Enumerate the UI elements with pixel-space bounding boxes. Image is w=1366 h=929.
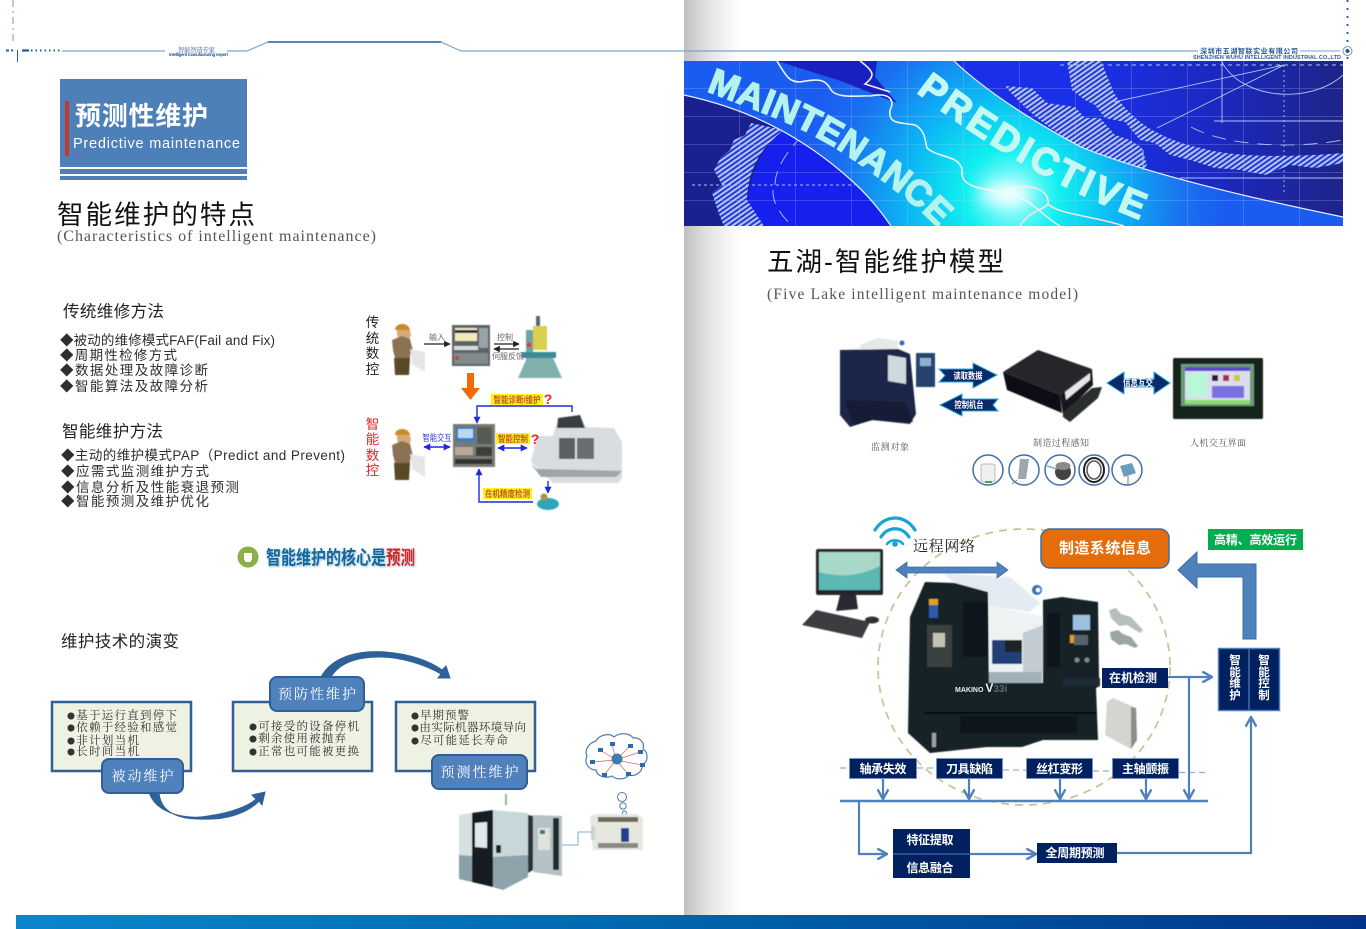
text block: traditional maintenance: ◆周期性检修方式 [60, 348, 178, 363]
arrow: orange transition [461, 373, 480, 400]
banner image: predictive maintenance gears [684, 61, 1343, 226]
icon: monitored machine [840, 338, 935, 427]
arrow: read data: 读取数据 [954, 370, 982, 381]
box: smart maintenance and control: 制 [1258, 689, 1270, 702]
main band [684, 61, 1343, 226]
controller, intelligent [453, 424, 495, 467]
label: intelligent CNC: 控 [366, 463, 380, 478]
label: intelligent CNC [366, 417, 380, 478]
text block: traditional maintenance: ◆智能算法及故障分析 [60, 379, 208, 394]
button: predictive maintenance [432, 755, 527, 789]
text: machine brand: MAKINO V33i [955, 681, 1007, 695]
squiggle gear outline [777, 61, 1060, 226]
panel: preventive maintenance [233, 702, 372, 771]
hatch ring right [1067, 61, 1343, 175]
header left label: Intelligent manufacturing expert [169, 52, 228, 57]
hatch gear teeth middle [1005, 86, 1147, 172]
label: traditional CNC: 控 [366, 362, 380, 377]
label: spindle chatter [1112, 758, 1178, 778]
box: smart maintenance and control: 能 [1258, 665, 1270, 679]
blue feedback lines [424, 406, 572, 502]
arrow: remote link [896, 562, 1008, 578]
label: tool defect: 刀具缺陷 [946, 761, 993, 776]
tag: smart diagnosis [491, 391, 552, 407]
icon: main machining center [908, 573, 1100, 753]
box: smart maintenance and control: 能 [1229, 665, 1241, 679]
icon: operator, traditional [392, 324, 425, 375]
box: full-cycle prediction: 全周期预测 [1046, 845, 1104, 860]
text block: traditional maintenance [60, 302, 275, 394]
panel: reactive maintenance: ●基于运行直到停下 [67, 707, 178, 723]
page fold shadow [684, 0, 740, 915]
labels: input, control, servo feedback: 控制 [497, 332, 513, 342]
title block: Predictive maintenance [73, 136, 240, 152]
box: feature extraction and fusion: 信息融合 [906, 860, 954, 875]
header rule [6, 0, 1352, 62]
arrow: feedback elbow [1178, 552, 1256, 639]
panel: reactive maintenance [52, 702, 191, 771]
box: smart maintenance and control: 智 [1258, 653, 1270, 667]
icon: sensing box [1003, 350, 1102, 422]
icon: tool holders [1109, 608, 1143, 648]
lower left dark [684, 96, 780, 226]
icon: probe dish [537, 494, 559, 510]
label: on-machine inspection: 在机检测 [1109, 670, 1157, 685]
heading: characteristics [57, 200, 376, 245]
label: on-machine inspection [1102, 668, 1168, 688]
button: preventive maintenance [270, 677, 364, 711]
text block: intelligent maintenance: ◆信息分析及性能衰退预测 [61, 479, 239, 495]
box: feature extraction and fusion [893, 829, 970, 878]
tag: high precision, high efficiency [1208, 529, 1303, 550]
tag: smart control [496, 431, 539, 447]
heading: five lake model: (Five Lake intelligent maintenance model) [767, 286, 1078, 303]
panel: predictive maintenance [396, 702, 535, 771]
caption: process sensing: 制造过程感知 [1033, 436, 1089, 449]
dark tooth inset [777, 61, 897, 103]
hatch ring left [712, 123, 784, 226]
icons: sensors [973, 455, 1142, 485]
icon: operator, intelligent [392, 429, 425, 480]
text block: intelligent maintenance: ◆应需式监测维护方式 [61, 463, 210, 479]
band edge lines [684, 61, 1343, 226]
arrow: information exchange [1107, 372, 1170, 394]
callout: manufacturing system info [1041, 529, 1169, 568]
banner word: predictive: PREDICTIVE [917, 72, 1149, 220]
arrow: reactive to preventive [149, 792, 265, 819]
panel: reactive maintenance: ●非计划当机 [67, 732, 140, 748]
text block: traditional maintenance: 传统维修方法 [63, 302, 164, 321]
button: reactive maintenance: 被动维护 [112, 766, 174, 786]
icon: HMI screen [1173, 358, 1263, 419]
connector: machine to PLC [562, 832, 592, 845]
label: traditional CNC: 统 [366, 331, 379, 346]
labels: input, control, servo feedback: 伺服反馈 [492, 351, 524, 361]
button: predictive maintenance: 预测性维护 [440, 762, 518, 782]
text block: traditional maintenance: ◆数据处理及故障诊断 [60, 363, 208, 378]
icon: network cloud [586, 734, 647, 815]
label: traditional CNC [366, 315, 380, 377]
header left label: 智能智造专家 [178, 45, 216, 54]
label: traditional CNC: 数 [366, 346, 380, 361]
tag: smart control: 智能控制 [498, 433, 528, 444]
box: smart maintenance and control: 维 [1229, 676, 1241, 690]
callout: core is prediction: 智能维护的核心是 [266, 546, 386, 569]
text block: traditional maintenance: ◆被动的维修模式FAF(Fail and Fix) [60, 333, 275, 348]
icon: data collector [1105, 698, 1137, 749]
footer band [16, 915, 1366, 929]
labels: input, control, servo feedback: 输入 [429, 332, 445, 342]
label: spindle chatter: 主轴颤振 [1122, 761, 1169, 776]
title block: 预测性维护 [75, 101, 208, 131]
tag: smart diagnosis: ? [544, 391, 552, 407]
header left label [169, 45, 228, 57]
title block [60, 79, 247, 180]
heading: evolution of maintenance: 维护技术的演变 [61, 632, 179, 651]
tag: high precision, high efficiency: 高精、高效运行 [1214, 532, 1297, 547]
heading: five lake model: 五湖-智能维护模型 [767, 247, 1004, 277]
icon: wifi [875, 518, 915, 547]
box: smart maintenance and control: 智 [1229, 653, 1241, 667]
caption: HMI: 人机交互界面 [1190, 436, 1246, 449]
text block: intelligent maintenance: ◆智能预测及维护优化 [61, 494, 209, 509]
label: traditional CNC: 传 [366, 315, 379, 330]
panel: predictive maintenance: ●由实际机器环境导向 [411, 719, 526, 735]
panel: preventive maintenance: ●剩余使用被抛弃 [249, 730, 346, 746]
panel: predictive maintenance: ●尽可能延长寿命 [411, 732, 508, 748]
label: intelligent CNC: 智 [366, 417, 379, 432]
tag: smart diagnosis: 智能诊断/维护 [494, 394, 540, 405]
box: smart maintenance and control: 控 [1258, 676, 1270, 690]
callout: core is prediction: 预测 [386, 547, 415, 569]
label: remote network: 远程网络 [913, 535, 975, 556]
box: smart maintenance and control: 护 [1229, 688, 1241, 702]
panel: predictive maintenance: ●早期预警 [411, 707, 470, 723]
icon: milling machine [518, 316, 562, 378]
arrow: preventive to predictive [321, 652, 450, 678]
text block: intelligent maintenance [61, 422, 345, 509]
banner word: maintenance: MAINTENANCE [708, 68, 955, 226]
header company label [1193, 46, 1341, 61]
drafting lines [692, 60, 1343, 226]
callout: manufacturing system info: 制造系统信息 [1059, 539, 1151, 557]
label: bearing failure: 轴承失效 [860, 761, 906, 776]
heading: characteristics: (Characteristics of intelligent maintenance) [57, 228, 376, 245]
button: preventive maintenance: 预防性维护 [278, 684, 356, 704]
diagram: CNC comparison [366, 315, 622, 510]
label: bearing failure [850, 758, 916, 778]
grid [684, 61, 1343, 226]
header company label: 深圳市五湖智联实业有限公司 [1200, 46, 1298, 56]
tag: smart control: ? [531, 431, 539, 447]
dashed sensing line [840, 768, 1208, 772]
label: tool defect [936, 758, 1002, 778]
panel: reactive maintenance: ●长时间当机 [67, 743, 140, 759]
text block: intelligent maintenance: ◆主动的维护模式PAP（Predict and Prevent) [61, 448, 345, 463]
label: lead screw deformation: 丝杠变形 [1036, 761, 1083, 776]
tag: on-machine precision test: 在机精度检测 [485, 488, 530, 499]
icon: PLC controller [590, 814, 643, 850]
arrows: input and control [424, 344, 519, 349]
button: reactive maintenance [102, 759, 183, 793]
icon: machining center photo [459, 794, 562, 890]
arrow: information exchange: 信息互交 [1123, 377, 1153, 388]
arrow: read data [939, 363, 997, 388]
label: smart interaction: 智能交互 [422, 432, 452, 443]
arrow: machine control [940, 394, 998, 416]
icon: machining center [531, 415, 622, 483]
heading: characteristics: 智能维护的特点 [57, 200, 255, 230]
label: intelligent CNC: 数 [366, 448, 380, 463]
panel: preventive maintenance: ●正常也可能被更换 [249, 743, 360, 759]
heading: five lake model [767, 247, 1078, 303]
box: smart maintenance and control [1218, 648, 1280, 711]
icon: controller, traditional [452, 325, 490, 366]
header company label: SHENZHEN WUHU INTELLIGENT INDUSTRIAL CO.,LTD [1193, 55, 1341, 61]
arrow: machine control: 控制机台 [954, 399, 984, 410]
panel: preventive maintenance: ●可接受的设备停机 [249, 718, 360, 734]
caption: monitored object: 监测对象 [871, 440, 909, 453]
box: feature extraction and fusion: 特征提取 [906, 832, 954, 847]
ring: dashed process circle [878, 529, 1170, 805]
text block: intelligent maintenance: 智能维护方法 [62, 422, 163, 441]
icon: desktop computer [802, 549, 883, 638]
label: intelligent CNC: 能 [366, 432, 379, 447]
label: lead screw deformation [1026, 758, 1092, 778]
labels: input, control, servo feedback [429, 332, 524, 361]
flow lines [840, 677, 1251, 854]
panel: reactive maintenance: ●依赖于经验和感觉 [67, 719, 178, 735]
box: full-cycle prediction [1037, 843, 1117, 863]
upper right field [954, 61, 1343, 217]
